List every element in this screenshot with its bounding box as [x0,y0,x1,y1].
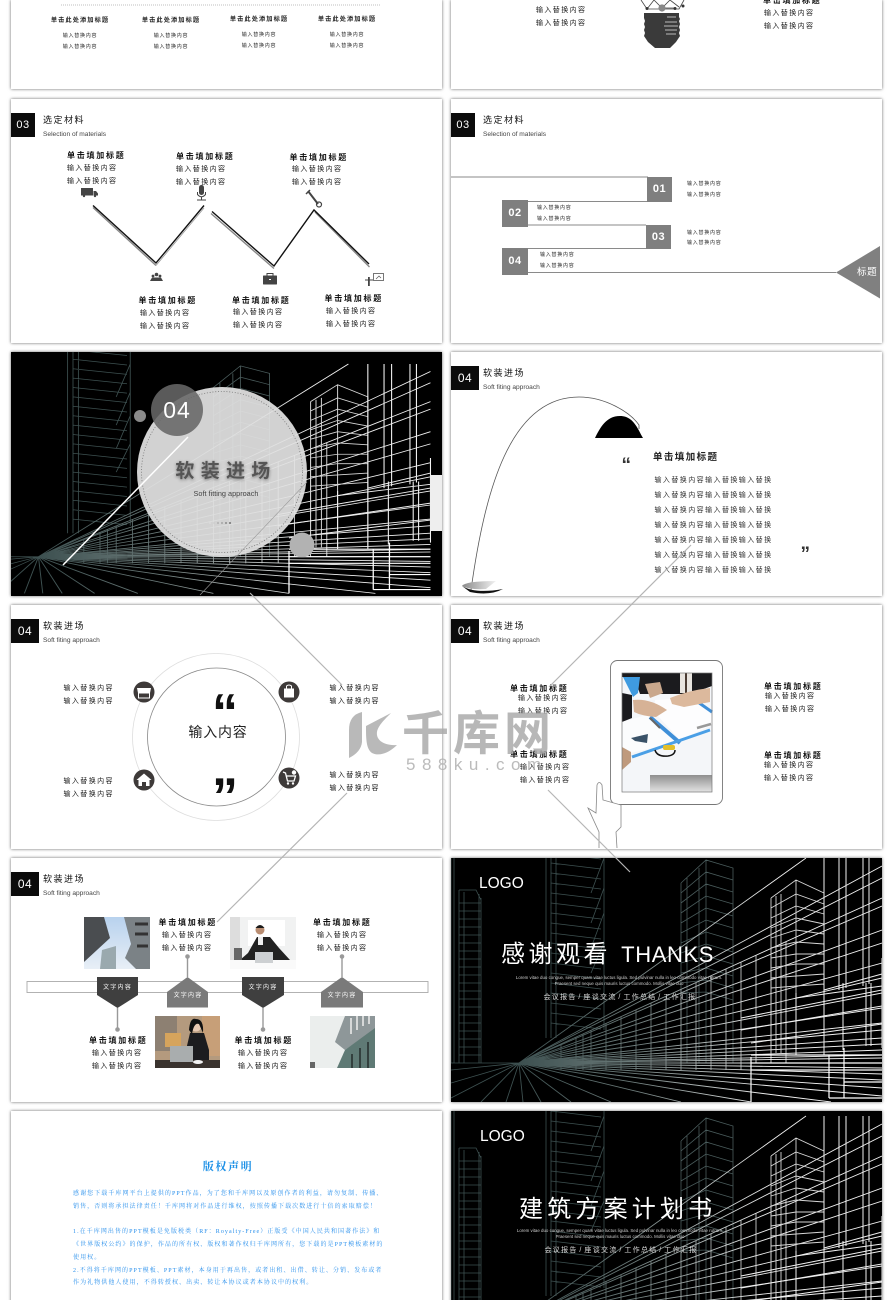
copyright text [73,1189,384,1286]
latin description [500,1228,740,1240]
copyright text: 感谢您下载千库网平台上提供的PPT作品，为了您和千库网以及原创作者的利益，请勿复制、传播、 [73,1191,384,1197]
text: step 02: 输入替换内容 [537,205,572,211]
text: upper right: 输入替换内容 [765,706,815,713]
column 4 text: 单击此处添加标题 [318,16,376,23]
text: step 01 [687,180,722,198]
text: step 04: 输入替换内容 [540,252,575,258]
column 3 text: 单击此处添加标题 [230,16,288,23]
watermark diagonal lines [200,482,691,922]
copyright text: 2.不得将千库网的PPT模板、PPT素材，本身用于再出售，或者出租、出借、转让、分销、发布或者 [73,1268,382,1274]
section number box: 03 [16,119,30,131]
section heading [43,874,100,896]
text: step 2: 单击填加标题 [176,152,234,160]
text: step 02: 输入替换内容 [537,216,572,222]
text: item 4: 输入替换内容 [238,1062,288,1070]
text: step 2: 输入替换内容 [176,166,226,172]
photo: woman on phone [155,1016,220,1068]
text: upper left [510,684,568,715]
copyright text: 使用权。 [73,1255,101,1261]
opening quote: “ [622,455,631,476]
section heading [43,621,100,644]
text: step 5: 输入替换内容 [233,322,283,328]
text: item 4: 单击填加标题 [234,1036,293,1044]
section heading: Selection of materials [483,130,546,138]
logo text: LOGO [480,1128,525,1145]
tablet frame [610,660,722,804]
section heading: 软装进场 [483,368,525,378]
text: item 2 [313,918,372,952]
wireframe city background [451,1111,882,1300]
text: lower right: 输入替换内容 [330,784,380,792]
step number 01: 01 [653,183,666,195]
latin description: Lorem vitae duo congue, semper quam vitae luctus ligula. Sed pulvinar nulla in leo commodo vitae rutrum. [516,974,722,980]
large grey circle [137,387,307,557]
grey pentagon 1 [167,977,208,1008]
icon: cart [278,768,300,788]
text: step 4 [138,296,197,330]
panel: cover slide [451,1111,882,1300]
text: item 3: 输入替换内容 [92,1062,142,1070]
text: upper right: 输入替换内容 [330,685,380,692]
text: upper right: 单击填加标题 [764,682,822,691]
text: left of bulb [536,6,586,27]
latin description: Praesent sed neque quis mauris luctus commodo. Mollis vitae duo [555,980,683,986]
text: lower left: 输入替换内容 [520,776,570,784]
step number 01 [647,177,672,202]
label: dark pentagon 2: 文字内容 [249,985,277,991]
section number box [451,619,479,643]
latin description [516,974,722,986]
quote heading: 单击填加标题 [653,452,718,463]
text: item 2: 单击填加标题 [313,918,372,927]
text: item 2: 输入替换内容 [317,932,367,939]
text: item 4 [234,1036,293,1070]
text: item 3 [89,1036,148,1070]
icon: hand outline [588,782,621,848]
text: step 03: 输入替换内容 [687,230,722,236]
text: left of bulb: 输入替换内容 [536,20,586,27]
text: step 04: 输入替换内容 [540,263,575,269]
text: step 02 [537,204,572,222]
text: lower right: 输入替换内容 [330,772,380,778]
text: step 4: 输入替换内容 [140,310,190,316]
text: upper left: 输入替换内容 [518,695,568,702]
latin description: Praesent sed neque quis mauris luctus commodo. Mollis vitae duo [556,1234,684,1238]
text: step 04 [540,252,575,269]
text: step 3: 输入替换内容 [292,178,342,186]
text: lower right [764,750,822,782]
text: item 1 [158,918,217,952]
text: step 03: 输入替换内容 [687,240,722,246]
column 2 text: 输入替换内容 [154,44,188,50]
quote body text: 输入替换内容输入替换输入替换 [654,476,773,484]
section heading: Soft fiting approach [483,384,540,390]
section heading: Soft fiting approach [483,636,540,644]
section heading: 软装进场 [43,621,85,631]
text: step 2: 输入替换内容 [176,178,226,186]
text: lower left: 单击填加标题 [510,750,568,758]
text: right of bulb: 输入替换内容 [764,10,814,17]
column 3 text: 输入替换内容 [242,32,276,38]
text: left of bulb: 输入替换内容 [536,7,586,14]
text: step 4: 输入替换内容 [140,322,190,330]
zigzag line chart [93,206,370,268]
dark pentagon 1 [97,977,138,1008]
text: step 5: 输入替换内容 [233,308,283,316]
text: step 1 [67,150,126,184]
section heading: 选定材料 [43,115,85,125]
photo: man with laptop [230,917,296,969]
text: lower left: 输入替换内容 [64,778,114,784]
watermark logo mark [349,712,397,758]
arrow triangle [836,246,880,298]
text: step 6: 输入替换内容 [326,308,376,314]
column 2 text: 输入替换内容 [154,33,188,39]
cover title: 建筑方案计划书 [519,1196,716,1223]
copyright heading: 版权声明 [203,1161,253,1173]
watermark name: 千库网 [402,707,555,760]
latin description: Lorem vitae duo congue, semper quam vitae luctus ligula. Sed pulvinar nulla in leo commodo vitae rutrum. [517,1228,723,1232]
watermark url: 588ku.com [406,755,548,774]
text: step 1: 单击填加标题 [67,150,126,160]
section heading [483,115,546,138]
label: grey pentagon 1: 文字内容 [174,993,202,999]
panel: section cover 04 [11,352,442,596]
text: upper right [764,682,822,713]
section number box [11,113,35,137]
step number 02 [502,200,528,227]
text: step 3: 输入替换内容 [292,166,342,172]
section heading: 软装进场 [483,621,525,631]
text: lower right: 输入替换内容 [764,774,814,782]
section number box [451,366,479,390]
panel: slide 03 staircase steps [451,99,882,343]
closing quote: ” [800,544,810,565]
icon: shopping bag [278,682,300,702]
timeline bar [27,982,428,992]
section number box [11,619,39,643]
section number box: 03 [456,119,470,131]
tagline: 会议报告 / 座谈交流 / 工作总结 / 工作汇报 [543,994,696,1001]
text: lower right [330,771,380,792]
wireframe city background [451,858,882,1102]
photo: skyscrapers [84,917,150,969]
text: lower right: 输入替换内容 [764,762,814,768]
concentric rings [132,654,300,820]
icon: shop [134,682,154,702]
quote body text: 输入替换内容输入替换输入替换 [654,552,773,558]
icon: presenter with board [365,274,384,286]
column 3 text: 输入替换内容 [242,43,276,49]
panel: thanks slide [451,858,882,1102]
text: upper left: 输入替换内容 [64,698,114,705]
panel: top-right slide with light bulb [451,0,882,89]
text: upper right [330,684,380,705]
icon: microphone [197,185,206,200]
text: step 1: 输入替换内容 [67,164,117,172]
text: lower left [64,777,114,798]
text: step 5 [232,296,290,328]
panel: timeline slide [11,858,442,1102]
text: item 1: 单击填加标题 [158,918,217,927]
stems [116,955,344,1031]
quote body text [654,476,773,574]
section number box: 04 [18,877,32,891]
column 3 text [230,16,288,49]
dark pentagon 2 [242,977,284,1008]
icon: wrench [306,190,322,207]
copyright text: 销售，否则将承担法律责任！千库网将对作品进行维权，按照传播下载次数进行十倍的索取赔偿！ [73,1204,377,1210]
column 4 text: 输入替换内容 [330,43,364,49]
quote body text: 输入替换内容输入替换输入替换 [654,506,773,514]
text: step 01: 输入替换内容 [687,181,722,187]
text: step 6 [324,294,383,328]
panel: arc lamp quote slide [451,352,882,596]
column 1 text: 输入替换内容 [63,33,97,39]
icon: people [150,273,163,281]
text: step 5: 单击填加标题 [232,296,290,304]
panel: tablet slide [451,605,882,849]
thanks title: 感谢观看 THANKS [501,941,714,968]
centre text: 输入内容 [188,724,248,740]
text: lower left: 输入替换内容 [64,790,114,798]
section heading [483,621,540,644]
wireframe city background [11,352,442,594]
section heading [43,115,106,138]
closing quote mark: ” [212,768,238,826]
text: upper left: 输入替换内容 [518,708,568,715]
step number 03 [646,225,671,249]
opening quote mark: “ [212,684,238,742]
quote body text: 输入替换内容输入替换输入替换 [654,492,773,498]
text: upper left: 输入替换内容 [64,685,114,692]
section number box: 04 [458,371,472,385]
tagline: 会议报告 / 座谈交流 / 工作总结 / 工作汇报 [544,1247,698,1254]
text: item 2: 输入替换内容 [317,945,367,952]
section subtitle: Soft fitting approach [194,489,258,498]
section heading: 选定材料 [483,115,525,125]
text: step 3 [290,152,348,186]
white diagonal line [63,437,188,565]
label: dark pentagon 1: 文字内容 [103,985,132,991]
text: step 3: 单击填加标题 [290,152,348,162]
bottom right circle [290,532,314,558]
text: upper right: 输入替换内容 [765,693,815,700]
text: item 3: 输入替换内容 [92,1050,142,1056]
quote body text: 输入替换内容输入替换输入替换 [654,522,773,528]
text: item 1: 输入替换内容 [162,945,212,952]
text: upper right: 输入替换内容 [330,698,380,705]
small dot [134,410,146,422]
section number box [11,872,39,896]
panel: slide 03 zigzag materials [11,99,442,343]
quote body text: 输入替换内容输入替换输入替换 [654,536,773,544]
text: item 1: 输入替换内容 [162,932,212,939]
column 1 text: 单击此处添加标题 [51,17,109,24]
section heading: 软装进场 [43,874,85,884]
tablet photo: meeting [622,673,712,792]
staircase connector lines [451,177,836,272]
icon: arc floor lamp [462,397,643,593]
triangle label: 标题 [857,267,877,278]
text: step 01: 输入替换内容 [687,192,722,198]
section number box: 04 [458,624,472,638]
icon: truck [81,188,98,197]
column 2 text [142,16,200,50]
text: lower left: 输入替换内容 [520,764,570,770]
section heading: Soft fiting approach [43,890,100,896]
text: right of bulb [763,0,822,30]
column 4 text [318,16,376,49]
copyright text: 作为礼物供他人使用，不得转授权、出卖、转让本协议或者本协议中的权利。 [73,1280,313,1286]
text: upper left: 单击填加标题 [510,684,568,693]
text: upper left [64,684,114,705]
column 4 text: 输入替换内容 [330,32,364,38]
section number box: 04 [18,624,32,638]
pagination dots [209,522,231,524]
logo text: LOGO [479,875,524,892]
text: lower left [510,750,570,784]
column 1 text [51,16,109,50]
panel: top-left slide with four columns [11,0,442,89]
icon: house [134,770,154,790]
step number 02: 02 [508,207,522,219]
step number 04: 04 [508,255,522,267]
grey pentagon 2 [321,977,363,1008]
section number box [451,113,475,137]
column 2 text: 单击此处添加标题 [142,17,200,24]
step number 03: 03 [652,231,665,243]
text: lower right: 单击填加标题 [764,750,822,760]
icon: light bulb [641,0,684,48]
panel: circle diagram slide [11,605,442,849]
text: step 6: 输入替换内容 [326,320,376,328]
text: right of bulb: 输入替换内容 [764,23,814,30]
text: step 6: 单击填加标题 [324,294,383,302]
quote body text: 输入替换内容输入替换输入替换 [654,566,773,574]
label: grey pentagon 2: 文字内容 [328,993,356,999]
copyright text: 1.在千库网出售的PPT模板是免版税类（RF：Royalty-Free）正版受《中国人民共和国著作法》和 [73,1229,380,1235]
text: step 1: 输入替换内容 [67,178,117,184]
section title: 软装进场 [175,461,277,482]
section heading [483,368,540,390]
text: step 03 [687,230,722,246]
section heading: Selection of materials [43,130,106,138]
column 1 text: 输入替换内容 [63,44,97,50]
text: step 4: 单击填加标题 [138,296,197,304]
section number: 04 [163,397,191,423]
copyright text: 《世界版权公约》的保护，作品的所有权、版权和著作权归千库网所有，您下载的是PPT模板素材的 [73,1242,384,1248]
text: item 3: 单击填加标题 [89,1036,148,1044]
step number 04 [502,248,528,275]
text: step 2 [176,152,234,186]
icon: briefcase [263,274,277,284]
photo: modern building [310,1016,375,1068]
number circle [151,384,203,436]
section heading: Soft fiting approach [43,636,100,644]
panel: copyright slide [11,1111,442,1300]
text: item 4: 输入替换内容 [238,1050,288,1056]
